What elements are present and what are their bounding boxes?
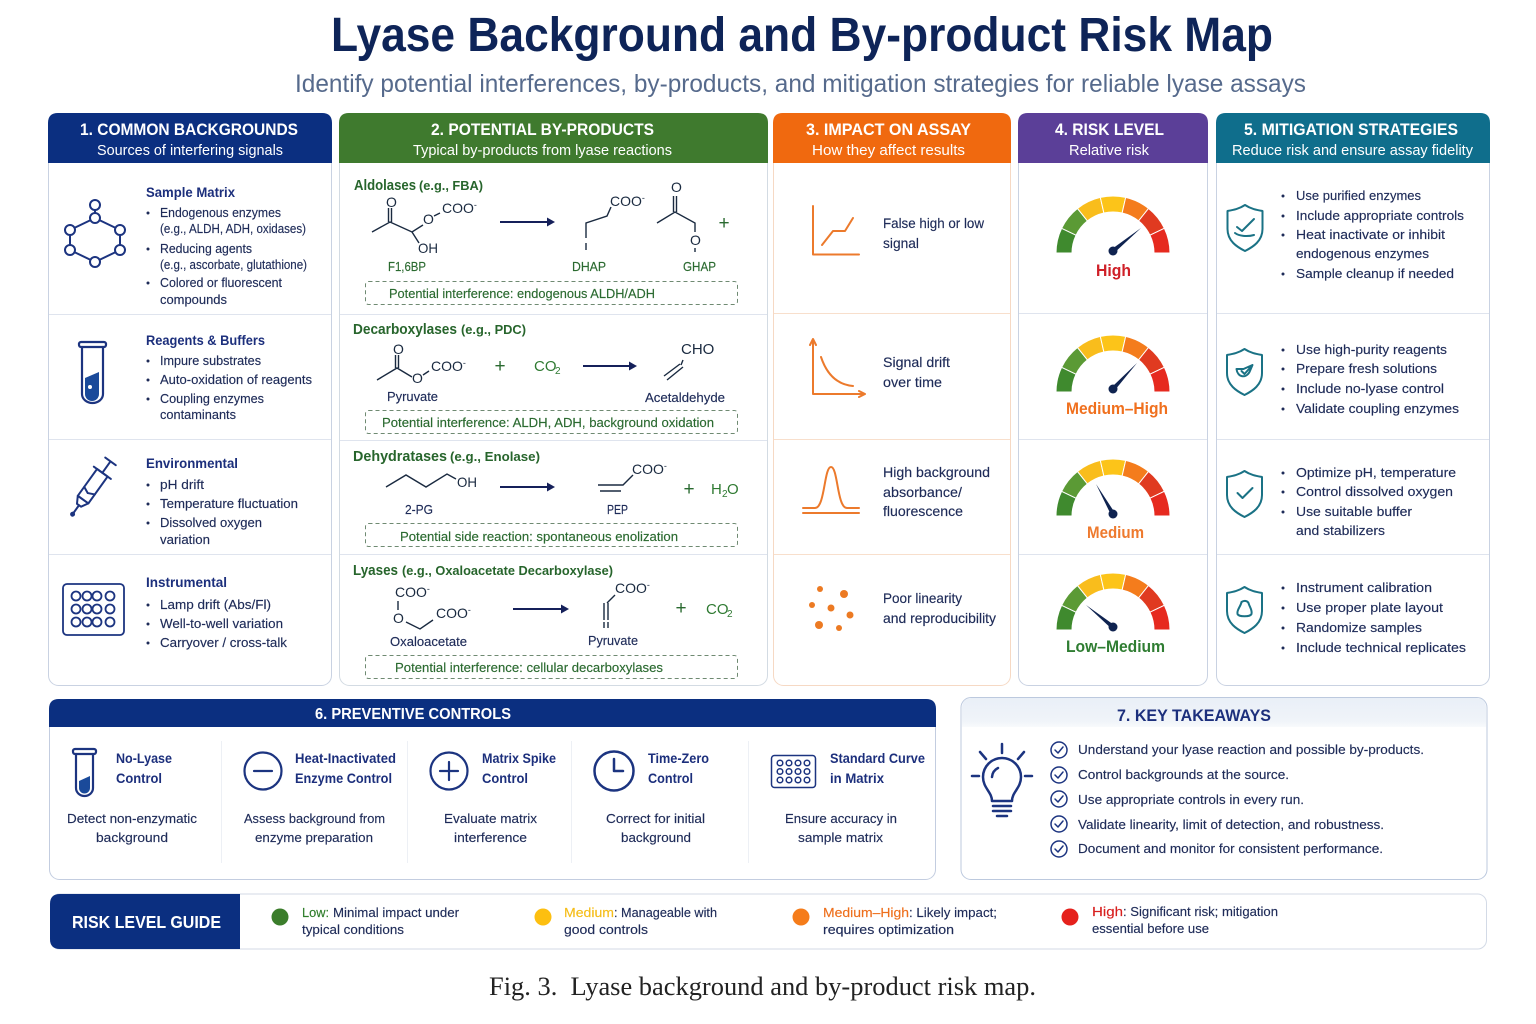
header: mitigation strategies: Reduce risk and ensure assay fidelity <box>1232 143 1474 159</box>
structure: F1,6BP: OH <box>418 240 438 256</box>
checklist: Control backgrounds at the source. <box>1078 767 1289 782</box>
gauge: medium-high <box>1056 335 1170 418</box>
legend: medium: good controls <box>564 922 649 937</box>
text: signal drift: Signal drift <box>883 354 950 370</box>
control: matrix spike: interference <box>454 830 527 845</box>
reaction: aldolases: Aldolases <box>354 178 416 194</box>
text: mitigation list 4: Randomize samples <box>1296 620 1423 635</box>
structure: PEP: COO <box>632 461 664 477</box>
title: Lyase Background and By-product Risk Map <box>331 9 1273 62</box>
reaction: aldolases: (e.g., FBA) <box>419 178 483 193</box>
icon: well plate <box>772 756 816 788</box>
text: sample matrix: Sample Matrix <box>146 185 235 200</box>
guide label <box>50 894 240 949</box>
icon: test tube <box>79 342 106 403</box>
structure: oxaloacetate: Oxaloacetate <box>390 634 467 649</box>
arrow <box>500 218 555 226</box>
text: false signal: signal <box>883 235 919 251</box>
structure: GHAP <box>657 179 716 274</box>
text: instrumental: Well-to-well variation <box>160 616 283 631</box>
structure: PEP: - <box>664 461 667 471</box>
text: environmental: Temperature fluctuation <box>160 496 298 511</box>
arrow <box>513 604 569 614</box>
callout: spontaneous enolization <box>366 524 738 546</box>
control: heat-inactivated: Enzyme Control <box>295 771 392 786</box>
icon: rising line chart <box>813 206 859 254</box>
reaction: dehydratases: Dehydratases <box>353 449 447 465</box>
structure: DHAP: - <box>642 193 645 203</box>
reaction: decarboxylases: (e.g., PDC) <box>461 322 526 337</box>
text: sample matrix <box>146 185 307 307</box>
header: common backgrounds: Sources of interfering signals <box>97 143 283 159</box>
icon: shield with flask <box>1227 587 1262 633</box>
header: impact on assay: 3. IMPACT ON ASSAY <box>806 120 972 139</box>
reaction: dehydratases: (e.g., Enolase) <box>450 449 540 464</box>
control: no-lyase: Control <box>116 771 162 786</box>
header: preventive controls <box>49 699 936 727</box>
text: poor linearity <box>883 590 996 626</box>
text: reagents and buffers: Auto-oxidation of reagents <box>160 372 312 387</box>
header: risk level: 4. RISK LEVEL <box>1055 120 1164 139</box>
structure: DHAP <box>572 193 645 274</box>
structure: 2-PG <box>386 474 477 517</box>
control: matrix spike: Control <box>482 771 528 786</box>
H2O: 2 <box>722 489 728 500</box>
header: risk level: Relative risk <box>1069 143 1150 159</box>
icon: molecule hexagon <box>65 200 125 267</box>
text: reagents and buffers: Reagents & Buffers <box>146 333 265 348</box>
text: mitigation list 2: Include no-lyase control <box>1296 381 1444 396</box>
structure: 2-PG: OH <box>457 474 477 490</box>
structure: GHAP: O <box>690 232 701 248</box>
legend: low: Low: <box>302 905 329 920</box>
CO2: CO <box>534 358 556 375</box>
reaction: decarboxylases <box>353 322 738 434</box>
text: signal drift: over time <box>883 374 942 390</box>
structure: PEP <box>598 461 667 517</box>
text: poor linearity: Poor linearity <box>883 590 962 606</box>
header: potential by-products: Typical by-products from lyase reactions <box>413 143 672 159</box>
checklist: Document and monitor for consistent performance. <box>1078 841 1383 856</box>
callout: ALDH ADH interference: Potential interference: ALDH, ADH, background oxidation <box>382 415 714 430</box>
structure: pyruvate: - <box>463 358 466 368</box>
text: environmental: Dissolved oxygen <box>160 515 262 530</box>
structure: acetaldehyde: Acetaldehyde <box>645 390 725 405</box>
gauge: medium <box>1056 459 1170 542</box>
arrow <box>500 482 555 492</box>
gauge: low-medium: Low–Medium <box>1066 638 1165 656</box>
text: mitigation list 4: Use proper plate layout <box>1296 600 1443 615</box>
text: mitigation list 2: Prepare fresh solutions <box>1296 361 1438 376</box>
legend: low: typical conditions <box>302 922 405 937</box>
header: mitigation strategies: 5. MITIGATION STRATEGIES <box>1244 120 1458 139</box>
CO2: CO <box>706 601 728 618</box>
legend: high: : Significant risk; mitigation <box>1123 904 1278 919</box>
icon: well plate <box>63 584 124 635</box>
text: environmental: variation <box>160 532 210 547</box>
panel: 3. impact on assay <box>773 113 1011 686</box>
reaction: lyases: (e.g., Oxaloacetate Decarboxylase) <box>402 563 613 578</box>
icon: spectral peak <box>803 467 859 513</box>
legend: medium: : Manageable with <box>614 905 717 920</box>
control: no-lyase: No-Lyase <box>116 751 172 766</box>
callout: endogenous interference <box>366 282 738 304</box>
legend: medium: Medium <box>564 905 614 920</box>
text: instrumental: Lamp drift (Abs/Fl) <box>160 597 271 612</box>
legend: high: essential before use <box>1092 921 1209 936</box>
text: mitigation list 3: Use suitable buffer <box>1296 504 1413 519</box>
checklist: Validate linearity, limit of detection, and robustness. <box>1078 817 1384 832</box>
header: impact on assay <box>773 113 1011 163</box>
panel: 2. potential by-products <box>339 113 768 686</box>
text: mitigation list 1: Heat inactivate or inhibit <box>1296 227 1445 242</box>
icon: clock <box>594 752 634 790</box>
structure: pyruvate product: COO <box>615 580 647 596</box>
checklist: Use appropriate controls in every run. <box>1078 792 1304 807</box>
text: mitigation list 2: Validate coupling enzymes <box>1296 401 1460 416</box>
figure caption: Fig. 3. Lyase background and by-product risk map. <box>489 972 1036 1001</box>
text: sample matrix: (e.g., ALDH, ADH, oxidases) <box>160 221 306 236</box>
legend: medium-high <box>792 905 997 937</box>
header: risk level <box>1018 113 1208 163</box>
structure: pyruvate <box>377 341 466 404</box>
control: standard curve: Ensure accuracy in <box>785 811 897 826</box>
structure: GHAP: GHAP <box>683 259 716 274</box>
legend: high <box>1062 904 1278 936</box>
panel: 5. mitigation strategies <box>1216 113 1490 686</box>
structure: pyruvate product: Pyruvate <box>588 633 638 648</box>
text: poor linearity: and reproducibility <box>883 610 996 626</box>
structure: pyruvate product <box>588 580 650 648</box>
icon: minus circle <box>244 752 282 790</box>
text: high background: absorbance/ <box>883 484 962 500</box>
callout: spontaneous enolization: Potential side reaction: spontaneous enolization <box>400 529 678 544</box>
text: mitigation list 4 <box>1282 580 1467 655</box>
control: standard curve: sample matrix <box>798 830 884 845</box>
reaction: decarboxylases: Decarboxylases <box>353 322 457 338</box>
reaction: lyases <box>353 563 738 678</box>
icon: shield with droplet check <box>1227 349 1262 395</box>
panel: 4. risk level <box>1018 113 1208 686</box>
panel: risk level guide <box>50 894 1486 949</box>
icon: light bulb <box>972 744 1032 816</box>
structure: oxaloacetate: COO <box>436 605 468 621</box>
structure: F1,6BP: - <box>474 200 477 210</box>
control: time-zero: Time-Zero <box>648 751 709 766</box>
structure: pyruvate: O <box>412 370 423 386</box>
text: reagents and buffers: Coupling enzymes <box>160 391 264 406</box>
text: environmental <box>146 456 298 547</box>
legend: medium-high: requires optimization <box>823 922 954 937</box>
legend: medium <box>534 905 717 937</box>
structure: oxaloacetate <box>390 584 471 649</box>
text: instrumental <box>146 575 288 650</box>
structure: PEP: PEP <box>607 502 628 517</box>
legend: medium-high: Medium–High <box>823 905 909 920</box>
structure: oxaloacetate: COO <box>395 584 427 600</box>
control: no-lyase: Detect non-enzymatic <box>67 811 198 826</box>
control: heat-inactivated: Heat-Inactivated <box>295 751 396 766</box>
control: matrix spike <box>430 751 556 845</box>
structure: pyruvate: Pyruvate <box>387 389 438 404</box>
callout: endogenous interference: Potential interference: endogenous ALDH/ADH <box>389 286 655 301</box>
panel: 7. key takeaways <box>961 698 1487 880</box>
reaction: lyases: Lyases <box>353 563 398 579</box>
control: time-zero <box>594 751 709 845</box>
guide label: RISK LEVEL GUIDE <box>72 912 221 932</box>
control: matrix spike: Evaluate matrix <box>444 811 538 826</box>
control: time-zero: background <box>621 830 691 845</box>
structure: F1,6BP: O <box>386 194 397 210</box>
panel: 6. preventive controls <box>49 699 936 880</box>
text: high background: fluorescence <box>883 503 963 519</box>
gauge: high: High <box>1096 262 1131 280</box>
CO2: 2 <box>555 366 561 377</box>
icon: plus circle <box>430 752 468 790</box>
structure: pyruvate: O <box>393 341 404 357</box>
checklist <box>1051 742 1424 857</box>
text: high background: High background <box>883 464 990 480</box>
text: mitigation list 4: Include technical replicates <box>1296 640 1467 655</box>
text: reagents and buffers: contaminants <box>160 407 236 422</box>
text: false signal <box>883 215 985 251</box>
text: environmental: Environmental <box>146 456 238 471</box>
text: sample matrix: compounds <box>160 292 227 307</box>
text: mitigation list 3: Optimize pH, temperature <box>1296 465 1456 480</box>
text: mitigation list 1: Include appropriate controls <box>1296 208 1465 223</box>
text: reagents and buffers: Impure substrates <box>160 353 261 368</box>
text: mitigation list 1: Sample cleanup if needed <box>1296 266 1454 281</box>
icon: shield with check <box>1227 471 1262 517</box>
CO2: 2 <box>727 609 733 620</box>
plus sign: + <box>683 479 695 500</box>
icon: test tube <box>73 749 96 796</box>
callout: cellular decarboxylases: Potential interference: cellular decarboxylases <box>395 660 664 675</box>
header: common backgrounds <box>48 113 332 163</box>
structure: F1,6BP: F1,6BP <box>388 259 426 274</box>
text: high background <box>883 464 990 519</box>
H2O: H <box>711 481 722 498</box>
icon: decay curve with axes <box>810 339 865 397</box>
structure: pyruvate: COO <box>431 358 463 374</box>
header: common backgrounds: 1. COMMON BACKGROUNDS <box>80 120 298 139</box>
header: potential by-products: 2. POTENTIAL BY-PRODUCTS <box>431 120 654 139</box>
control: standard curve <box>772 751 925 845</box>
reaction: dehydratases <box>353 449 739 546</box>
plus sign: + <box>494 356 506 377</box>
callout: ALDH ADH interference <box>366 410 738 434</box>
text: sample matrix: (e.g., ascorbate, glutathione) <box>160 257 307 272</box>
structure: F1,6BP: O <box>423 211 434 227</box>
text: sample matrix: Reducing agents <box>160 241 252 256</box>
structure: oxaloacetate: - <box>468 605 471 615</box>
header: mitigation strategies <box>1216 113 1490 163</box>
text: instrumental: Instrumental <box>146 575 227 590</box>
icon: shield with trend check <box>1228 205 1262 251</box>
legend: high: High <box>1092 904 1123 919</box>
text: mitigation list 1 <box>1282 188 1465 281</box>
structure: F1,6BP: COO <box>442 200 474 216</box>
structure: F1,6BP <box>372 194 477 274</box>
gauge: medium: Medium <box>1087 524 1144 542</box>
text: sample matrix: Colored or fluorescent <box>160 275 282 290</box>
structure: acetaldehyde: CHO <box>681 341 714 358</box>
header: impact on assay: How they affect results <box>812 143 965 159</box>
control: no-lyase: background <box>96 830 168 845</box>
structure: GHAP: O <box>671 179 682 195</box>
text: mitigation list 4: Instrument calibration <box>1296 580 1432 595</box>
legend: low <box>272 905 460 937</box>
control: heat-inactivated: Assess background from <box>244 811 385 826</box>
text: mitigation list 1: Use purified enzymes <box>1296 188 1421 203</box>
text: mitigation list 3: Control dissolved oxygen <box>1296 484 1453 499</box>
text: false signal: False high or low <box>883 215 985 231</box>
gauge: high <box>1056 196 1170 280</box>
structure: acetaldehyde <box>645 341 725 405</box>
heading: key takeaways: 7. KEY TAKEAWAYS <box>1117 706 1271 725</box>
control: standard curve: Standard Curve <box>830 751 925 766</box>
structure: DHAP: DHAP <box>572 259 606 274</box>
control: heat-inactivated: enzyme preparation <box>255 830 373 845</box>
text: mitigation list 1: endogenous enzymes <box>1296 246 1430 261</box>
text: sample matrix: Endogenous enzymes <box>160 205 281 220</box>
legend: low: Minimal impact under <box>333 905 460 920</box>
control: standard curve: in Matrix <box>830 771 884 786</box>
H2O: O <box>727 481 739 498</box>
structure: 2-PG: 2-PG <box>405 502 433 517</box>
control: time-zero: Correct for initial <box>606 811 705 826</box>
text: reagents and buffers <box>146 333 312 422</box>
structure: oxaloacetate: - <box>427 584 430 594</box>
text: signal drift <box>883 354 950 390</box>
legend: medium-high: : Likely impact; <box>909 905 997 920</box>
text: mitigation list 3: and stabilizers <box>1296 523 1386 538</box>
control: time-zero: Control <box>648 771 693 786</box>
structure: oxaloacetate: O <box>393 610 404 626</box>
text: instrumental: Carryover / cross-talk <box>160 635 288 650</box>
icon: scattered dots <box>809 586 854 631</box>
gauge: low-medium <box>1056 573 1170 656</box>
text: mitigation list 2 <box>1282 342 1460 416</box>
reaction: aldolases <box>354 178 738 304</box>
control: heat-inactivated <box>244 751 396 845</box>
icon: syringe <box>63 455 119 522</box>
callout: cellular decarboxylases <box>366 656 738 678</box>
text: environmental: pH drift <box>160 477 204 492</box>
panel: 1. common backgrounds <box>48 113 332 686</box>
text: mitigation list 2: Use high-purity reagents <box>1296 342 1448 357</box>
gauge: medium-high: Medium–High <box>1066 400 1168 418</box>
H2O <box>711 481 739 500</box>
text: mitigation list 3 <box>1282 465 1456 538</box>
subtitle: Identify potential interferences, by-products, and mitigation strategies for reliable lyase assays <box>295 70 1306 98</box>
structure: pyruvate product: - <box>647 580 650 590</box>
header: potential by-products <box>339 113 768 163</box>
arrow <box>583 362 637 370</box>
plus sign: + <box>718 213 730 234</box>
plus sign: + <box>675 598 687 619</box>
header: preventive controls: 6. PREVENTIVE CONTROLS <box>315 706 511 723</box>
checklist: Understand your lyase reaction and possible by-products. <box>1078 742 1424 757</box>
structure: DHAP: COO <box>610 193 642 209</box>
control: no-lyase <box>67 749 198 845</box>
control: matrix spike: Matrix Spike <box>482 751 556 766</box>
